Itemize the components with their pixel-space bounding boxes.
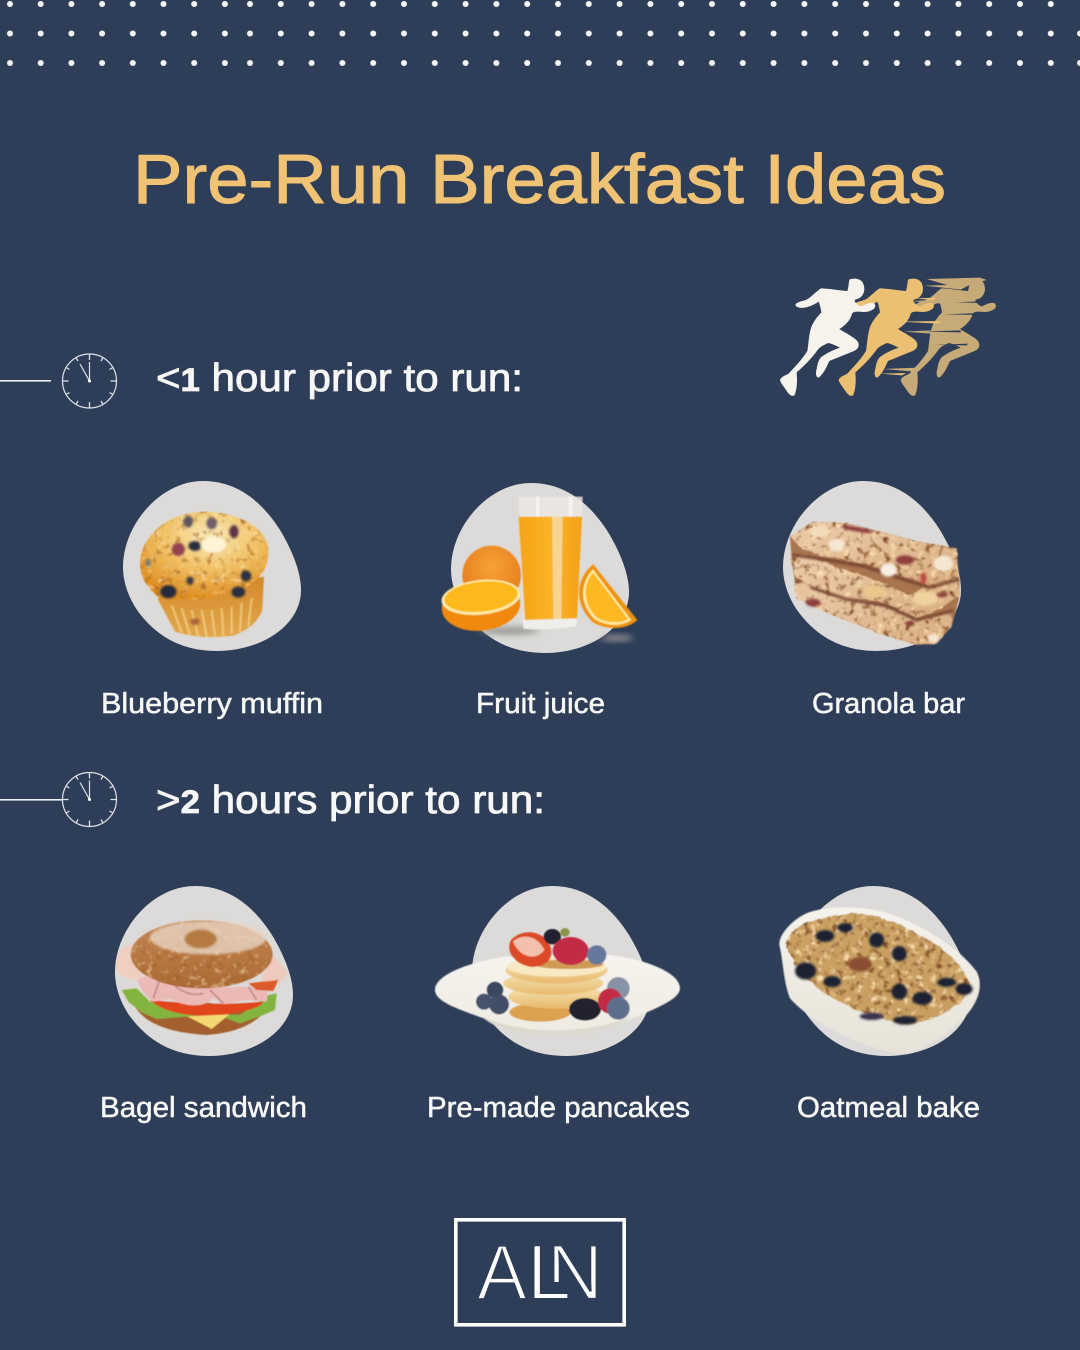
food item: bagel sandwich (100, 886, 307, 1124)
logo letter L: L (527, 1228, 571, 1316)
granola illustration (790, 522, 960, 645)
blob backdrop (123, 481, 301, 651)
bagel illustration (116, 920, 288, 1035)
section two heading (0, 772, 545, 826)
label: Pre-made pancakes (427, 1092, 690, 1124)
logo letter N: N (547, 1228, 603, 1316)
food item: fruit juice (439, 483, 637, 720)
food item: oatmeal bake (779, 886, 980, 1124)
food item: pre-made pancakes (427, 886, 690, 1124)
runner: white (780, 279, 875, 396)
pancakes illustration (435, 928, 680, 1034)
muffin illustration (140, 512, 268, 637)
connector line (0, 799, 62, 801)
heading text: <1 hour prior to run: (156, 357, 523, 400)
section one heading (0, 354, 523, 408)
icon: clock (62, 354, 116, 408)
runner: bronze (884, 278, 996, 396)
logo: ALN (456, 1220, 624, 1325)
blob backdrop (783, 481, 961, 651)
food item: granola bar (783, 481, 965, 720)
oatmeal illustration (779, 907, 980, 1054)
runner: gold (839, 279, 942, 396)
juice illustration (439, 497, 637, 640)
title: Pre-Run Breakfast Ideas (133, 140, 946, 218)
label: Oatmeal bake (797, 1092, 980, 1124)
icon: three runners (780, 278, 996, 396)
icon: clock (62, 772, 116, 826)
label: Blueberry muffin (101, 688, 323, 720)
connector line (0, 380, 51, 382)
logo knockout below N stem (548, 1282, 560, 1302)
logo letter A: A (477, 1228, 527, 1316)
label: Fruit juice (476, 688, 605, 720)
blob backdrop (472, 886, 650, 1056)
label: Granola bar (812, 688, 965, 720)
label: Bagel sandwich (100, 1092, 307, 1124)
blob backdrop (115, 886, 293, 1056)
blob backdrop (451, 483, 629, 653)
logo frame (456, 1220, 624, 1325)
food item: blueberry muffin (101, 481, 323, 720)
blob backdrop (793, 886, 971, 1056)
dot pattern (0, 0, 1080, 72)
heading text: >2 hours prior to run: (156, 779, 545, 822)
